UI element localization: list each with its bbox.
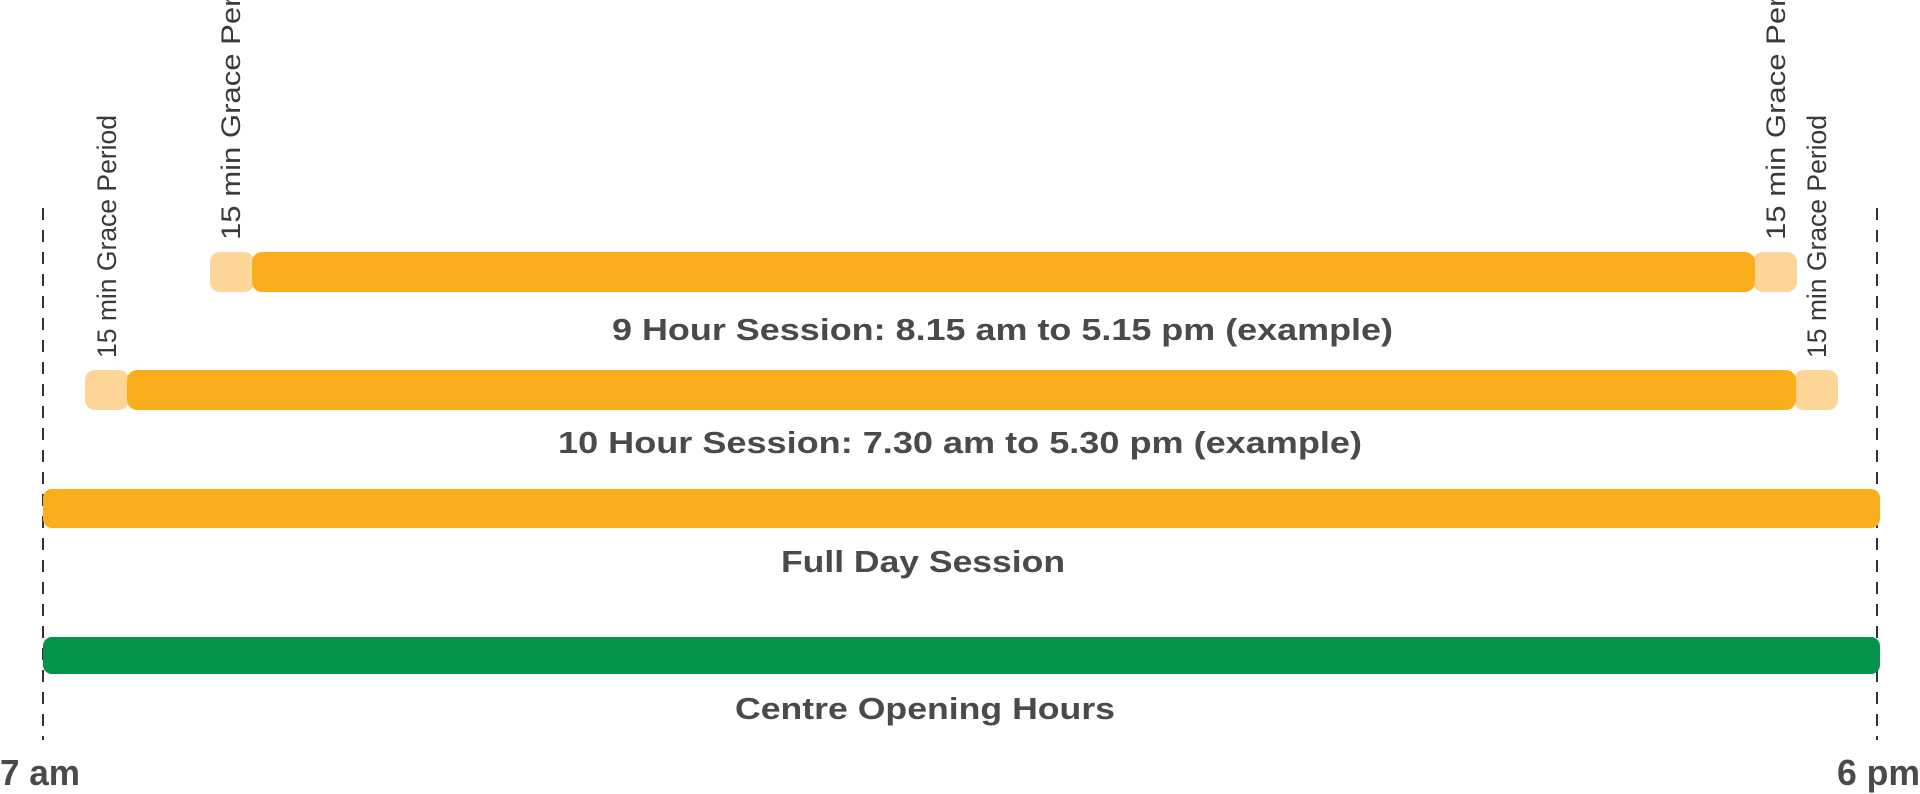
- 10 hour session bar: [85, 370, 1838, 410]
- centre opening hours bar: [43, 637, 1880, 674]
- 7 am label: 7 am: [0, 752, 80, 793]
- 9 hour label: 9 Hour Session: 8.15 am to 5.15 pm (example): [612, 312, 1393, 347]
- 6 pm label: 6 pm: [1837, 752, 1920, 793]
- full day label: Full Day Session: [781, 544, 1065, 579]
- dashed line: 7 am: [42, 208, 44, 740]
- 9 hour session bar: [210, 252, 1797, 292]
- dashed line: 6 pm: [1876, 208, 1878, 740]
- centre opening hours label: Centre Opening Hours: [735, 691, 1115, 726]
- 10 hour label: 10 Hour Session: 7.30 am to 5.30 pm (example): [558, 425, 1362, 460]
- 10 hour grace label left: 15 min Grace Period: [92, 115, 122, 358]
- full day bar: [43, 489, 1880, 528]
- 10 hour grace label right: 15 min Grace Period: [1802, 115, 1832, 358]
